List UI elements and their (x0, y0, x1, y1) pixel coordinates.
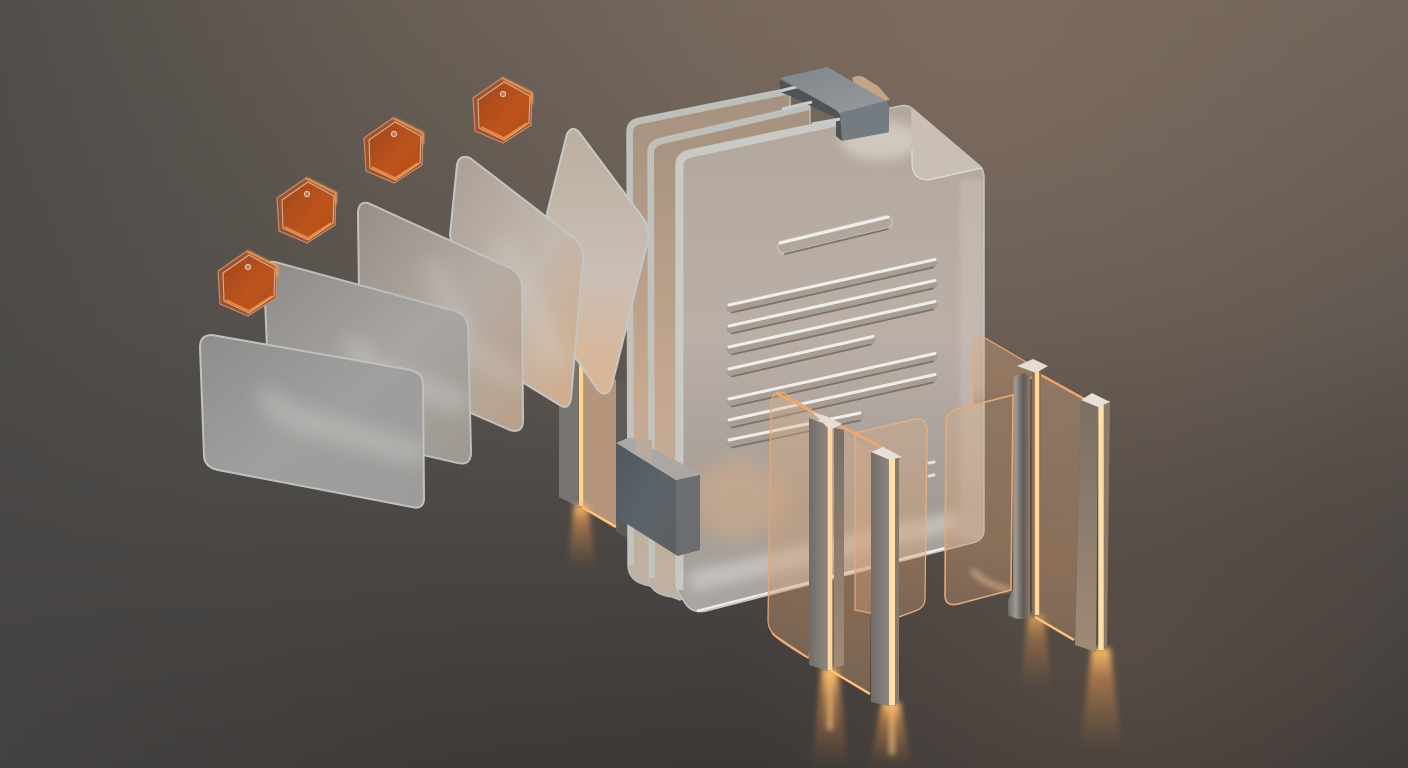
left glass pane (768, 392, 832, 658)
hexagon tag 3 (364, 118, 423, 183)
panel 2 (264, 262, 471, 464)
lower metal clip (616, 437, 702, 556)
floor light reflections (812, 668, 912, 768)
hexagon tag 2 (277, 178, 336, 243)
panel 3 (358, 203, 523, 431)
rear glass pane (855, 419, 927, 618)
panel 4 (450, 157, 583, 407)
hexagon tag 4 (473, 78, 532, 143)
plate bottom edge highlight (697, 548, 945, 611)
second pillar (871, 452, 890, 706)
end pillar (1075, 400, 1098, 652)
top glowing edge (776, 393, 885, 449)
front plate soft reflections (680, 120, 984, 590)
clip top face (780, 67, 887, 116)
top metal clip (780, 67, 889, 141)
back document plate (627, 88, 790, 590)
glowing post (1032, 372, 1041, 617)
middle document plate (648, 104, 810, 600)
bottom glowing edge (830, 670, 870, 694)
rear glass pane (973, 337, 1040, 405)
clip front face (840, 101, 889, 141)
stacked document plates (627, 76, 984, 612)
plate edges entering clip (780, 86, 840, 124)
folded corner (911, 110, 982, 180)
hexagon tag 1 (218, 251, 277, 316)
left turnstile gate (768, 392, 927, 768)
peach tabs behind the clip (852, 76, 890, 104)
floor light reflections (1020, 615, 1122, 750)
exploded frosted panels (200, 129, 648, 508)
panel 5 (547, 129, 648, 394)
inner glass pane (830, 425, 872, 693)
copper hexagon tags (218, 78, 532, 316)
door glass pane (945, 395, 1013, 605)
hinge cylinder (1008, 374, 1030, 619)
right glass pane (1035, 375, 1081, 640)
embossed text lines (729, 217, 935, 476)
panel 1 (200, 335, 424, 508)
first pillar (809, 418, 828, 671)
right turnstile gate (945, 337, 1122, 750)
front document plate (676, 106, 984, 612)
rear gate behind the stack (559, 340, 628, 570)
